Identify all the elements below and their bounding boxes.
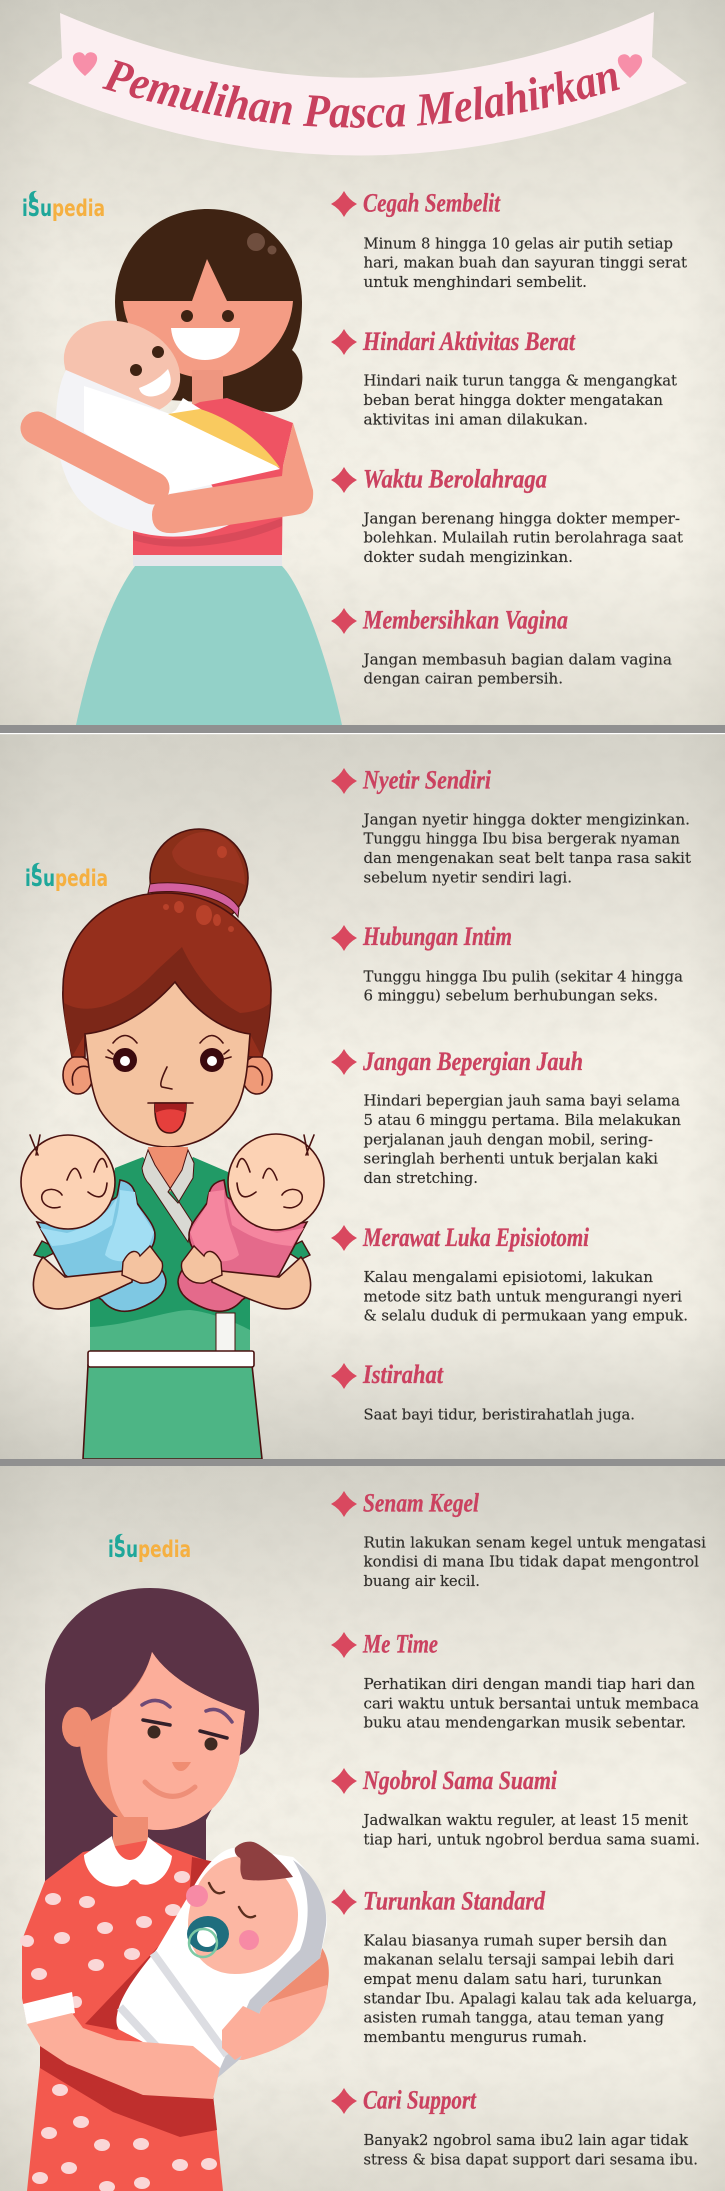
tip: Istirahat: Saat bayi tidur, beristirahatlah juga.	[364, 1405, 635, 1423]
tip: Merawat Luka Episiotomi: metode sitz bath untuk mengurangi nyeri	[364, 1287, 682, 1305]
tip: Waktu Berolahraga: bolehkan. Mulailah rutin berolahraga saat	[364, 529, 683, 547]
background: section 3	[0, 1466, 725, 2191]
arm	[211, 1257, 311, 1309]
tip: Turunkan Standard: standar Ibu. Apalagi kalau tak ada keluarga,	[364, 1989, 697, 2007]
tip: Hindari Aktivitas Berat: beban berat hingga dokter mengatakan	[364, 391, 663, 409]
sash strip	[216, 1313, 235, 1351]
hair	[115, 209, 302, 412]
tip: Jangan Bepergian Jauh: seringlah berhenti untuk berjalan kaki	[364, 1150, 658, 1168]
tip: Cegah Sembelit: Minum 8 hingga 10 gelas air putih setiap	[364, 234, 673, 252]
nose	[172, 1762, 191, 1771]
tip: Jangan Bepergian Jauh	[331, 1047, 681, 1187]
far hand	[222, 2006, 262, 2060]
tip: Nyetir Sendiri	[331, 765, 691, 886]
mouth	[155, 1103, 186, 1133]
tip: Ngobrol Sama Suami: tiap hari, untuk ngobrol berdua sama suami.	[364, 1830, 700, 1848]
tip: Jangan Bepergian Jauh: dan stretching.	[364, 1169, 478, 1187]
tip: Turunkan Standard	[331, 1886, 697, 2046]
swaddle shadow	[215, 1860, 326, 2080]
polka dots	[20, 1871, 217, 2191]
pacifier	[187, 1916, 229, 1957]
separator 1	[0, 725, 725, 734]
ears	[63, 1056, 272, 1094]
baby mouth	[139, 369, 171, 397]
tip: Merawat Luka Episiotomi	[331, 1223, 688, 1325]
tip: Hubungan Intim	[331, 922, 683, 1005]
tip: Nyetir Sendiri: Tunggu hingga Ibu bisa bergerak nyaman	[364, 830, 680, 848]
tip: Turunkan Standard: empat menu dalam satu hari, turunkan	[364, 1970, 662, 1988]
hand	[181, 1246, 222, 1283]
tip: Cari Support	[331, 2085, 698, 2168]
tip: Hindari Aktivitas Berat: Hindari naik turun tangga & mengangkat	[364, 372, 677, 390]
tip: Turunkan Standard: Turunkan Standard	[363, 1886, 546, 1915]
head	[228, 1134, 324, 1230]
collar	[84, 1836, 172, 1887]
background: section 1	[0, 0, 725, 725]
tip: Turunkan Standard: asisten rumah tangga, atau teman yang	[364, 2009, 664, 2027]
neck	[192, 370, 223, 410]
tip: Turunkan Standard: membantu mengurus rumah.	[364, 2028, 587, 2046]
head	[21, 1135, 115, 1229]
swaddle folds	[120, 1953, 227, 2055]
tip: Hindari Aktivitas Berat: aktivitas ini aman dilakukan.	[364, 410, 588, 428]
title: Pemulihan Pasca Melahirkan	[102, 60, 620, 128]
tip: Nyetir Sendiri: dan mengenakan seat belt tanpa rasa sakit	[364, 849, 691, 867]
tip: Nyetir Sendiri: Nyetir Sendiri	[362, 765, 492, 794]
tip: Membersihkan Vagina	[331, 605, 672, 688]
tip: Merawat Luka Episiotomi: Kalau mengalami episiotomi, lakukan	[364, 1268, 653, 1286]
tip: Me Time: buku atau mendengarkan musik sebentar.	[364, 1714, 686, 1732]
tip: Membersihkan Vagina: Membersihkan Vagina	[362, 605, 568, 634]
icon: right heart	[618, 54, 642, 78]
tip: Membersihkan Vagina: Jangan membasuh bagian dalam vagina	[361, 650, 672, 668]
tip: Waktu Berolahraga: Waktu Berolahraga	[363, 464, 547, 493]
tip: Me Time: Me Time	[362, 1630, 438, 1659]
icon: left heart	[73, 52, 97, 76]
dress	[22, 1840, 223, 2191]
tip: Jangan Bepergian Jauh: Hindari bepergian jauh sama bayi selama	[364, 1092, 680, 1110]
belt	[88, 1351, 254, 1367]
tip: Membersihkan Vagina: dengan cairan pembersih.	[364, 670, 563, 688]
logo: section 3: iSupedia	[108, 1537, 191, 1563]
face	[123, 259, 293, 378]
brows, lashes, nose	[106, 1036, 231, 1089]
tip: Waktu Berolahraga	[331, 464, 683, 566]
tip: Turunkan Standard: Kalau biasanya rumah super bersih dan	[364, 1931, 667, 1949]
closed eyes	[209, 1883, 255, 1917]
baby eyes	[130, 346, 164, 376]
tip: Nyetir Sendiri: Jangan nyetir hingga dokter mengizinkan.	[361, 810, 690, 828]
eyes	[148, 1726, 218, 1750]
swaddle	[116, 1848, 327, 2081]
near arm	[27, 2013, 220, 2099]
skirt	[76, 566, 342, 725]
cheeks	[186, 1885, 259, 1950]
hair highlights	[247, 233, 276, 254]
tip: Jangan Bepergian Jauh: perjalanan jauh dengan mobil, sering-	[364, 1130, 653, 1148]
hair bun	[150, 829, 248, 927]
collar	[142, 1150, 194, 1242]
tip: Istirahat: Istirahat	[362, 1360, 444, 1389]
hand	[122, 1246, 163, 1283]
ear	[62, 1707, 92, 1747]
tip: Nyetir Sendiri: sebelum nyetir sendiri lagi.	[364, 868, 572, 886]
tip: Jangan Bepergian Jauh: Jangan Bepergian Jauh	[362, 1047, 583, 1076]
neck	[113, 1817, 148, 1867]
tip: Waktu Berolahraga: Jangan berenang hingga dokter memper-	[361, 509, 680, 527]
baby hair	[235, 1842, 293, 1880]
illustration: mother with twins	[21, 829, 324, 1459]
mouth	[145, 1782, 195, 1796]
eyes	[181, 310, 234, 322]
tip: Me Time	[331, 1630, 699, 1732]
tip: Hindari Aktivitas Berat: Hindari Aktivitas Berat	[362, 327, 576, 356]
tip: Cegah Sembelit: untuk menghindari sembelit.	[364, 273, 587, 291]
arm shadow	[133, 518, 282, 547]
baby: blue bundle	[21, 1135, 166, 1311]
illustration: mother with sleeping baby	[20, 1588, 329, 2191]
tip: Waktu Berolahraga: dokter sudah mengizinkan.	[364, 548, 573, 566]
tip: Cari Support: Banyak2 ngobrol sama ibu2 lain agar tidak	[364, 2131, 689, 2149]
tip: Cari Support: stress & bisa dapat support dari sesama ibu.	[364, 2150, 698, 2168]
face	[85, 982, 250, 1147]
dress lower	[90, 1310, 250, 1352]
dark dress strap	[85, 1857, 215, 2030]
tip: Merawat Luka Episiotomi: Merawat Luka Episiotomi	[362, 1223, 590, 1252]
belt	[133, 555, 282, 566]
logo: section 1: iSupedia	[22, 196, 105, 222]
dress upper	[90, 1157, 250, 1352]
tip: Hubungan Intim: Hubungan Intim	[362, 922, 512, 951]
hair highlights	[163, 846, 234, 932]
hair shadow	[64, 947, 270, 1057]
tip: Jangan Bepergian Jauh: 5 atau 6 minggu pertama. Bila melakukan	[364, 1111, 681, 1129]
tip: Cegah Sembelit: Cegah Sembelit	[363, 188, 501, 218]
arm	[33, 1257, 133, 1309]
tip: Me Time: Perhatikan diri dengan mandi tiap hari dan	[364, 1675, 695, 1693]
tip: Me Time: cari waktu untuk bersantai untuk membaca	[364, 1694, 699, 1712]
tip: Ngobrol Sama Suami: Jadwalkan waktu reguler, at least 15 menit	[362, 1811, 688, 1829]
tip: Merawat Luka Episiotomi: & selalu duduk di permukaan yang empuk.	[364, 1307, 688, 1325]
title banner	[28, 12, 687, 156]
tip: Senam Kegel: Rutin lakukan senam kegel untuk mengatasi	[364, 1533, 706, 1551]
swaddle front	[84, 386, 280, 494]
tip: Istirahat	[331, 1360, 635, 1423]
face	[80, 1652, 245, 1830]
swaddle outer	[56, 370, 233, 537]
sleeve cuff	[23, 1992, 75, 2025]
background: section 2	[0, 733, 725, 1459]
tip: Ngobrol Sama Suami	[331, 1766, 700, 1848]
tip: Hubungan Intim: 6 minggu) sebelum berhubungan seks.	[364, 987, 658, 1005]
brows	[142, 1700, 232, 1722]
hair	[45, 1588, 259, 1885]
baby head	[50, 304, 194, 432]
hair band	[148, 883, 239, 917]
tip: Cari Support: Cari Support	[363, 2085, 477, 2114]
separator 2	[0, 1459, 725, 1466]
tip: Senam Kegel: Senam Kegel	[363, 1489, 480, 1518]
tip: Senam Kegel: kondisi di mana Ibu tidak dapat mengontrol	[364, 1553, 699, 1571]
neck	[148, 1147, 188, 1192]
tip: Cegah Sembelit	[331, 188, 687, 291]
tip: Cegah Sembelit: hari, makan buah dan sayuran tinggi serat	[364, 254, 687, 272]
illustration: mother with baby	[37, 209, 342, 725]
arms	[152, 423, 313, 533]
baby face	[188, 1856, 298, 1974]
swaddle yellow	[168, 409, 280, 468]
logo: section 2: iSupedia	[25, 866, 108, 892]
baby: pink bundle	[178, 1134, 324, 1311]
tip: Turunkan Standard: makanan selalu tersaji sampai lebih dari	[364, 1951, 674, 1969]
tip: Senam Kegel	[331, 1489, 706, 1590]
tip: Senam Kegel: buang air kecil.	[364, 1572, 480, 1590]
smile	[171, 328, 240, 360]
top	[133, 398, 293, 555]
tip: Hubungan Intim: Tunggu hingga Ibu pulih (sekitar 4 hingga	[364, 967, 683, 985]
eyes	[113, 1048, 224, 1072]
tip: Hindari Aktivitas Berat	[331, 327, 677, 428]
sleeves	[34, 1241, 310, 1260]
hair	[63, 893, 271, 1057]
far arm	[267, 1948, 329, 2003]
tip: Ngobrol Sama Suami: Ngobrol Sama Suami	[362, 1766, 558, 1795]
